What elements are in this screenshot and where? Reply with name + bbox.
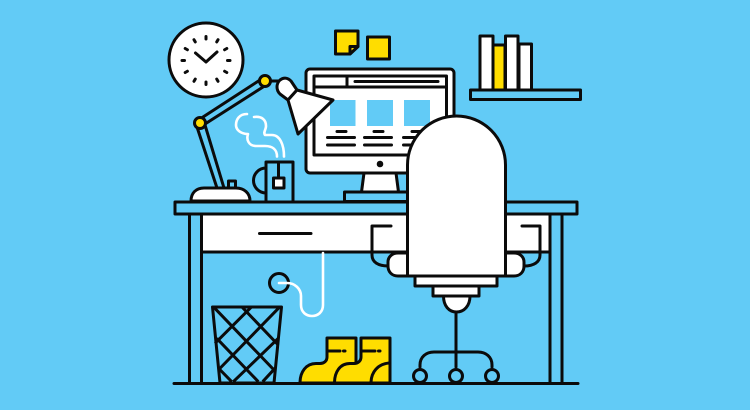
icon: desktop monitor	[306, 69, 454, 202]
desk: top, drawer and legs	[175, 202, 577, 383]
icon: office chair	[372, 116, 540, 382]
icon: wall clock	[169, 23, 243, 97]
floor line	[174, 382, 578, 385]
cable and socket	[270, 253, 323, 316]
icon: shelf with books	[470, 36, 580, 100]
steam	[236, 114, 284, 156]
icon: waste basket	[212, 307, 282, 383]
icon: yellow boots	[300, 338, 390, 383]
icon: mug with tea bag	[253, 162, 293, 202]
icon: sticky note with folded corner	[336, 31, 358, 54]
icon: desk lamp	[191, 76, 333, 201]
icon: sticky note	[368, 37, 390, 59]
